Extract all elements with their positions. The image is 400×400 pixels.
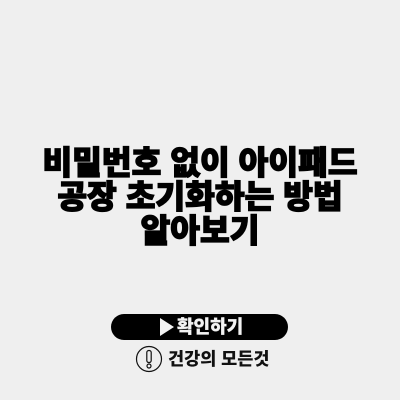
button label: 확인하기 — [177, 317, 243, 337]
title: 알아보기 — [141, 213, 259, 249]
title — [42, 145, 358, 249]
button: confirm — [111, 314, 288, 340]
title: 공장 초기화하는 방법 — [57, 179, 343, 215]
brand name: 건강의 모든것 — [168, 349, 269, 369]
title: 비밀번호 없이 아이패드 — [42, 145, 358, 181]
icon: play triangle — [160, 318, 174, 336]
icon: exclamation circle — [136, 346, 162, 372]
